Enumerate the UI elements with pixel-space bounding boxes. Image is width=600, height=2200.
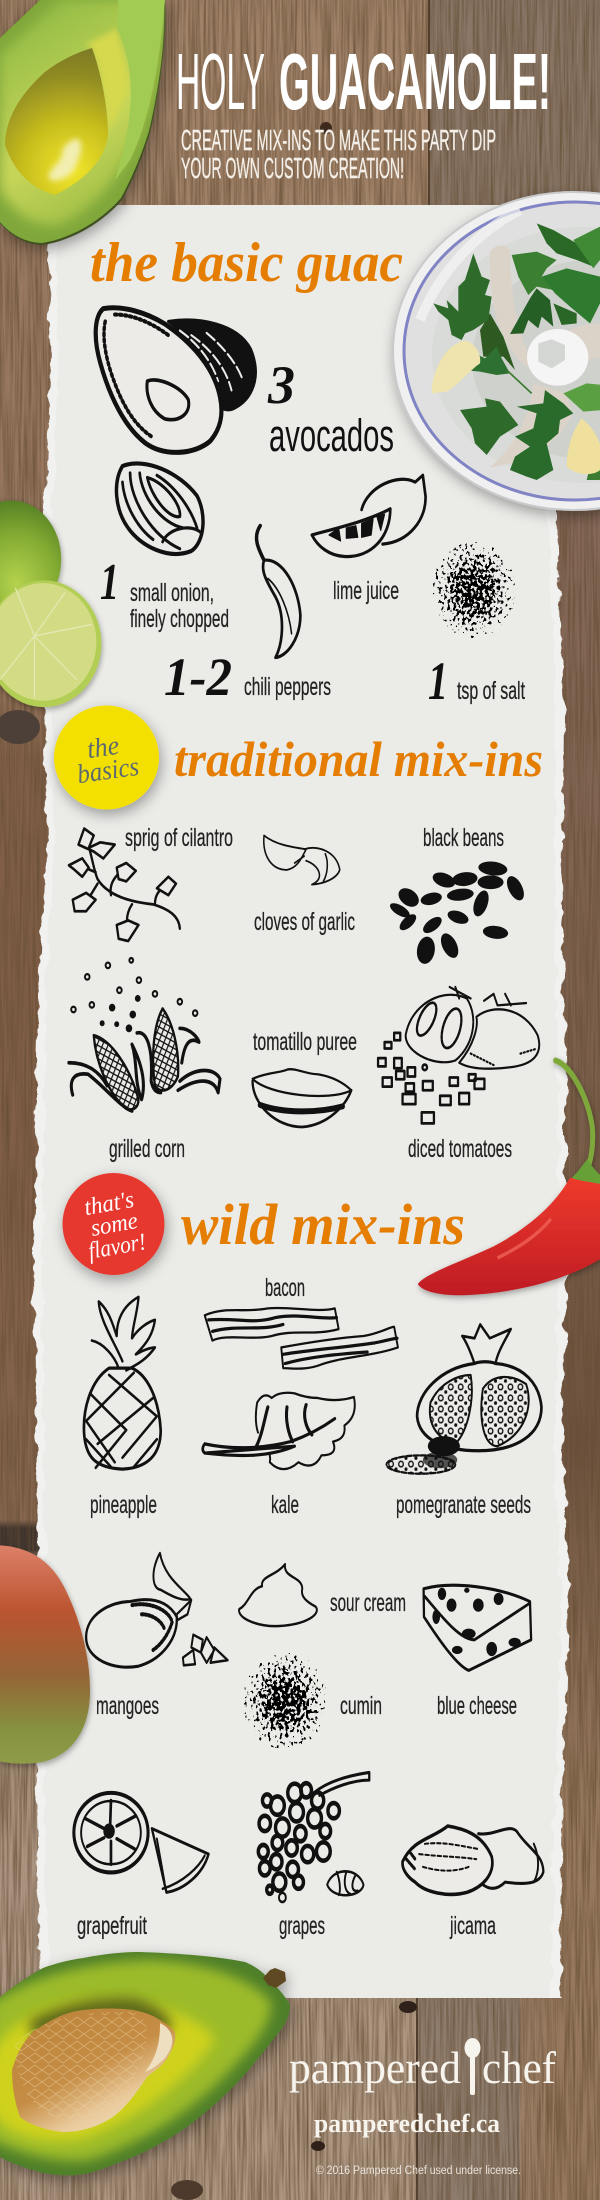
icon: lime — [312, 475, 426, 557]
garlic cloves — [432, 341, 480, 393]
text: wild labels: sour cream — [330, 1589, 406, 1617]
section: basic guac illustrations — [96, 308, 516, 658]
icon: cumin pile — [242, 1653, 328, 1749]
icon: grapes — [258, 1772, 369, 1902]
photo: mango — [0, 1545, 90, 1764]
badge: that's some flavor: flavor! — [86, 1229, 148, 1265]
badge: the basics — [54, 706, 159, 810]
heading: title — [176, 37, 551, 126]
icon: onion — [116, 463, 203, 554]
avocado stem — [263, 1968, 286, 1988]
logo: pampered chef: pampered — [289, 2043, 461, 2093]
icon: bacon — [205, 1308, 398, 1369]
text: ingredient quantities: tsp of salt — [457, 677, 525, 705]
text: traditional labels: diced tomatoes — [408, 1135, 512, 1163]
text: wild labels: cumin — [340, 1692, 382, 1720]
badge: that's some flavor: some — [89, 1208, 140, 1242]
badge: that's some flavor — [62, 1173, 164, 1275]
parsley leaves — [433, 223, 600, 480]
icon: jicama — [402, 1826, 543, 1894]
photo: red chili pepper — [418, 1060, 600, 1295]
icon: spoon — [464, 2038, 480, 2095]
text: ingredient quantities: avocados — [269, 410, 394, 461]
text: ingredient quantities — [100, 355, 525, 711]
text: wild labels: bacon — [265, 1274, 305, 1302]
text: traditional labels: sprig of cilantro — [125, 824, 233, 852]
text: ingredient quantities: chili peppers — [244, 673, 331, 701]
icon: salt pile — [432, 542, 516, 638]
icon: pomegranate — [386, 1324, 541, 1474]
text: ingredient quantities: finely chopped — [130, 605, 229, 633]
section: traditional illustrations — [69, 829, 541, 1474]
badge: the basics: basics — [75, 751, 141, 789]
text: wild labels: blue cheese — [437, 1692, 517, 1720]
text: wild labels: jicama — [449, 1912, 496, 1940]
text: wild labels: kale — [271, 1491, 299, 1519]
text: traditional labels: grilled corn — [109, 1135, 185, 1163]
badge: that's some flavor: that's — [82, 1187, 136, 1221]
heading: wild mix-ins: wild mix-ins — [181, 1192, 465, 1257]
icon: chili pepper — [257, 526, 300, 658]
icon: mango — [86, 1553, 228, 1667]
subtitle — [181, 125, 496, 185]
icon: blue cheese — [424, 1585, 531, 1670]
heading: the basic guac: the basic guac — [90, 232, 403, 294]
badge: the basics: the — [85, 730, 121, 764]
icon: kale — [203, 1393, 355, 1469]
processor blades — [490, 245, 600, 467]
icon: grilled corn — [69, 958, 220, 1111]
text: wild labels: grapefruit — [77, 1912, 147, 1940]
icon: cilantro — [69, 829, 180, 941]
text: ingredient quantities: 3 — [267, 355, 295, 415]
icon: sour cream — [239, 1564, 317, 1626]
text: wild labels: mangoes — [96, 1692, 159, 1720]
photo: lime whole and cut — [0, 501, 101, 707]
text: traditional labels: black beans — [423, 824, 504, 852]
text: traditional labels: cloves of garlic — [254, 908, 355, 936]
logo: pampered chef: chef — [482, 2043, 556, 2093]
icon: tomatoes — [378, 987, 539, 1123]
hub — [527, 329, 588, 386]
text: ingredient quantities: small onion, — [130, 579, 214, 607]
heading: title: HOLY — [176, 37, 265, 126]
icon: pineapple — [84, 1297, 161, 1469]
text: wild labels: pineapple — [90, 1491, 157, 1519]
icon: garlic — [264, 835, 340, 885]
icon: bowl of puree — [253, 1069, 351, 1127]
text: wild labels — [77, 1274, 531, 1940]
photo: bottom avocado — [0, 1952, 290, 2175]
text: ingredient quantities: lime juice — [333, 577, 399, 605]
text: ingredient quantities: 1 — [428, 651, 448, 711]
text: ingredient quantities: 1-2 — [164, 647, 232, 707]
avocado seed — [12, 2008, 175, 2132]
text: traditional labels: tomatillo puree — [253, 1028, 357, 1056]
text: wild labels: grapes — [279, 1912, 325, 1940]
copyright: © 2016 Pampered Chef used under license. — [316, 2165, 521, 2177]
website url: pamperedchef.ca — [314, 2109, 500, 2138]
section: wild illustrations — [74, 1553, 543, 1902]
icon: grapefruit — [74, 1793, 209, 1892]
photo: top avocado half — [0, 0, 165, 245]
icon: black beans — [388, 860, 527, 966]
photo: food processor bowl — [393, 192, 600, 510]
paper panel — [34, 190, 570, 2015]
icon: avocado — [96, 308, 256, 452]
text: ingredient quantities: 1 — [100, 554, 119, 611]
text: traditional labels — [109, 824, 512, 1163]
logo: pampered chef — [289, 2038, 556, 2095]
heading: traditional mix-ins: traditional mix-ins — [174, 731, 543, 787]
